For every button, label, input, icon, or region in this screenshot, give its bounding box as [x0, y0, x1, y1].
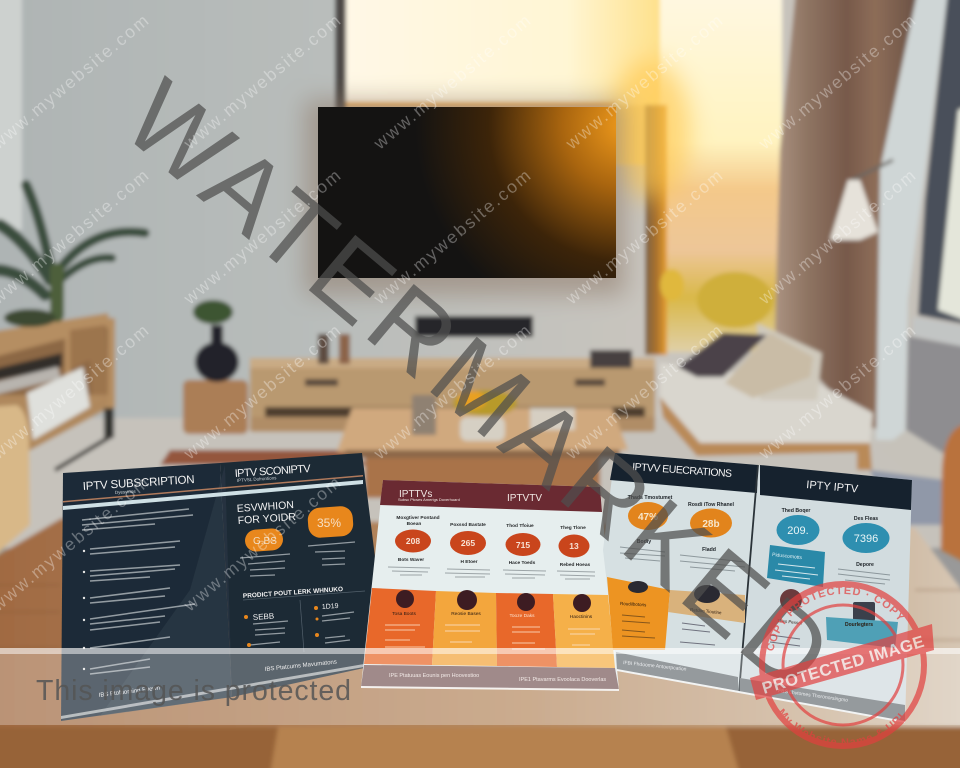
footer text	[623, 660, 849, 704]
titles: PRODICT POUT LERK WHNUKO	[243, 586, 343, 600]
repeating site watermarks	[0, 10, 919, 616]
TV shadow	[305, 100, 625, 295]
price circles: 715	[516, 540, 530, 550]
floor	[0, 418, 960, 548]
column icons	[396, 590, 591, 612]
header text: IPTTVs	[399, 489, 432, 500]
column headings: H Etoer	[460, 559, 478, 565]
column headings: Hace Toeds	[509, 560, 536, 566]
stripe	[63, 480, 363, 510]
pages	[603, 453, 758, 692]
column headings: Rosdi iTow Rhanel	[688, 502, 735, 508]
orange badge large	[307, 505, 354, 538]
orange circles	[628, 502, 732, 538]
section labels: Dourlegters	[845, 622, 873, 628]
teal circles	[776, 515, 890, 553]
column headings: Thod Tfoiue	[506, 523, 534, 529]
subtitle text	[115, 475, 277, 495]
price circles: 265	[461, 538, 475, 548]
teal circles: 7396	[854, 533, 878, 545]
window post	[645, 105, 667, 355]
TV screen	[318, 107, 616, 278]
titles	[82, 463, 343, 622]
sheer curtain	[876, 0, 948, 440]
column headings: Bodiy	[637, 539, 651, 545]
section labels: Thes Pexsol	[777, 618, 802, 626]
column labels: Haoctinins	[570, 614, 593, 620]
left and right pages	[61, 463, 232, 721]
chair left	[0, 405, 30, 560]
orange section	[607, 577, 670, 650]
repeating site watermarks: www.mywebsite.com	[179, 165, 344, 309]
column headings: Thads Tmostumet	[628, 495, 673, 501]
wall	[0, 0, 960, 440]
footer text: IPE Ptatuuas Eounis pen Hoovestioo	[389, 673, 479, 679]
column headings: Moxgtiver Pontand	[396, 515, 440, 521]
vase and plant	[193, 300, 239, 382]
orange circles: 47%	[638, 512, 658, 523]
column headings: Poxssd Bastate	[450, 522, 486, 528]
protected notice: This image is protected	[36, 675, 351, 707]
repeating site watermarks: www.mywebsite.com	[369, 10, 534, 154]
body	[361, 480, 619, 690]
column headings	[628, 495, 878, 568]
large diagonal watermark: WATERMARKED	[103, 58, 853, 713]
protected image stamp	[750, 581, 934, 749]
header text	[398, 489, 542, 504]
sill and wall below	[913, 317, 960, 348]
titles	[632, 461, 859, 496]
coffee table	[337, 408, 628, 452]
column headings: Des Fleas	[854, 516, 878, 522]
white bullets	[83, 550, 85, 670]
window frame right	[918, 0, 960, 325]
section labels: Retdoo Tioutine	[690, 607, 722, 615]
orange circles: 28b	[702, 519, 720, 530]
footer	[361, 665, 619, 690]
titles: IPTV SCONIPTV	[234, 463, 312, 480]
column labels: Tosa Boots	[392, 611, 416, 617]
table front planks	[0, 727, 960, 768]
orange columns	[364, 588, 436, 665]
subtitle text: Dyesvinos	[115, 489, 137, 495]
footer text: IPE1 Ptavarms Evoolaca Dooverlas	[519, 677, 606, 683]
soundbar	[415, 316, 533, 337]
column headings: Thed Boqer	[782, 508, 810, 514]
icons	[628, 581, 875, 621]
headers	[610, 453, 758, 493]
titles: IPTV SUBSCRIPTION	[82, 474, 195, 493]
titles: ESVWHION	[236, 499, 294, 515]
footer: IBS Ptofuorning Evewn	[99, 686, 160, 699]
footer text: FBS Lhvtomes Thoronorsingmo	[778, 688, 849, 704]
side table	[183, 380, 248, 434]
repeating site watermarks: www.mywebsite.com	[561, 10, 726, 154]
protected image stamp: PROTECTED IMAGE	[760, 633, 926, 698]
TV console	[250, 358, 655, 432]
titles: FOR YOIDR	[237, 511, 297, 527]
left shelf	[0, 313, 115, 470]
grey body lines	[388, 567, 595, 579]
watermark strip top highlight	[0, 648, 960, 654]
column headings	[396, 515, 591, 568]
footer	[99, 659, 337, 699]
teal card: Piduscomotts	[772, 552, 803, 561]
titles: 1D19	[322, 603, 339, 611]
titles: IPTY IPTV	[806, 479, 859, 496]
column labels: Reosie Bases	[451, 611, 481, 617]
column headings: Theg Tlone	[560, 525, 586, 531]
brochure 3: white and teal bifold	[603, 453, 912, 723]
column headings: Depore	[856, 562, 874, 568]
protected image stamp: COPY PROTECTED · COPY	[766, 587, 904, 650]
sunset glow	[610, 60, 690, 200]
page footer	[616, 652, 738, 691]
repeating site watermarks: www.mywebsite.com	[754, 320, 919, 464]
curtains	[775, 0, 918, 430]
footer: IBS Ptatcums Mavumatons	[265, 659, 337, 673]
teal card	[767, 545, 825, 587]
repeating site watermarks: www.mywebsite.com	[561, 320, 726, 464]
orange badge large: 35%	[317, 516, 341, 530]
column headings: Bots Waver	[398, 557, 424, 563]
section body lines	[622, 615, 800, 646]
window left	[335, 0, 346, 115]
section labels	[620, 601, 873, 628]
column headings: Boean	[407, 521, 421, 527]
body lines	[620, 547, 890, 584]
column headings: Rebed Hoeas	[560, 562, 591, 568]
subtitle text: IPTVSL Dofrontions	[237, 475, 277, 483]
repeating site watermarks: www.mywebsite.com	[179, 472, 344, 616]
header text: IPTVTV	[507, 493, 542, 504]
column labels	[392, 611, 593, 620]
repeating site watermarks: www.mywebsite.com	[561, 165, 726, 309]
orange bullets	[244, 606, 319, 647]
repeating site watermarks: www.mywebsite.com	[754, 165, 919, 309]
right page body lines	[240, 542, 365, 652]
left page body lines	[82, 509, 195, 674]
plant	[0, 185, 145, 327]
price circles	[395, 530, 590, 558]
teal lower panel	[826, 617, 898, 648]
column headings: Fladd	[702, 547, 716, 553]
orange badge small	[244, 528, 284, 552]
column body lines	[385, 625, 600, 649]
rug	[160, 450, 370, 465]
brochure 2: orange centre sheet	[361, 480, 619, 691]
header text: Subsc Ptcses Amerigs Doverhuard	[398, 497, 460, 502]
chair right	[941, 423, 960, 565]
repeating site watermarks: www.mywebsite.com	[179, 10, 344, 154]
column labels: Tooze Daks	[509, 613, 535, 619]
repeating site watermarks: www.mywebsite.com	[369, 320, 534, 464]
repeating site watermarks: www.mywebsite.com	[179, 320, 344, 464]
repeating site watermarks: www.mywebsite.com	[754, 10, 919, 154]
orange badge small: G.BS	[253, 536, 277, 547]
table plank joints	[0, 585, 960, 648]
price circles: 208	[406, 536, 420, 546]
brochure 1: dark bifold	[61, 453, 375, 721]
footer text	[389, 673, 606, 683]
flowers	[453, 390, 517, 416]
price circles: 13	[569, 541, 579, 551]
protected image stamp: My Website Name & URL	[780, 708, 902, 743]
repeating site watermarks: www.mywebsite.com	[369, 165, 534, 309]
bushes	[697, 272, 773, 328]
teal circles: 209.	[787, 525, 809, 537]
window right	[660, 0, 782, 352]
table top	[0, 518, 960, 768]
header	[380, 480, 602, 512]
floor lamp	[830, 160, 893, 240]
section labels: Roudilbotoris	[620, 601, 647, 607]
sofa	[660, 323, 873, 470]
footer text: IFBI Fhdoome Antoerpcation	[623, 660, 687, 673]
titles: SEBB	[253, 612, 274, 622]
watermark strip	[0, 648, 960, 725]
titles: IPTVV EUECRATIONS	[632, 461, 732, 480]
